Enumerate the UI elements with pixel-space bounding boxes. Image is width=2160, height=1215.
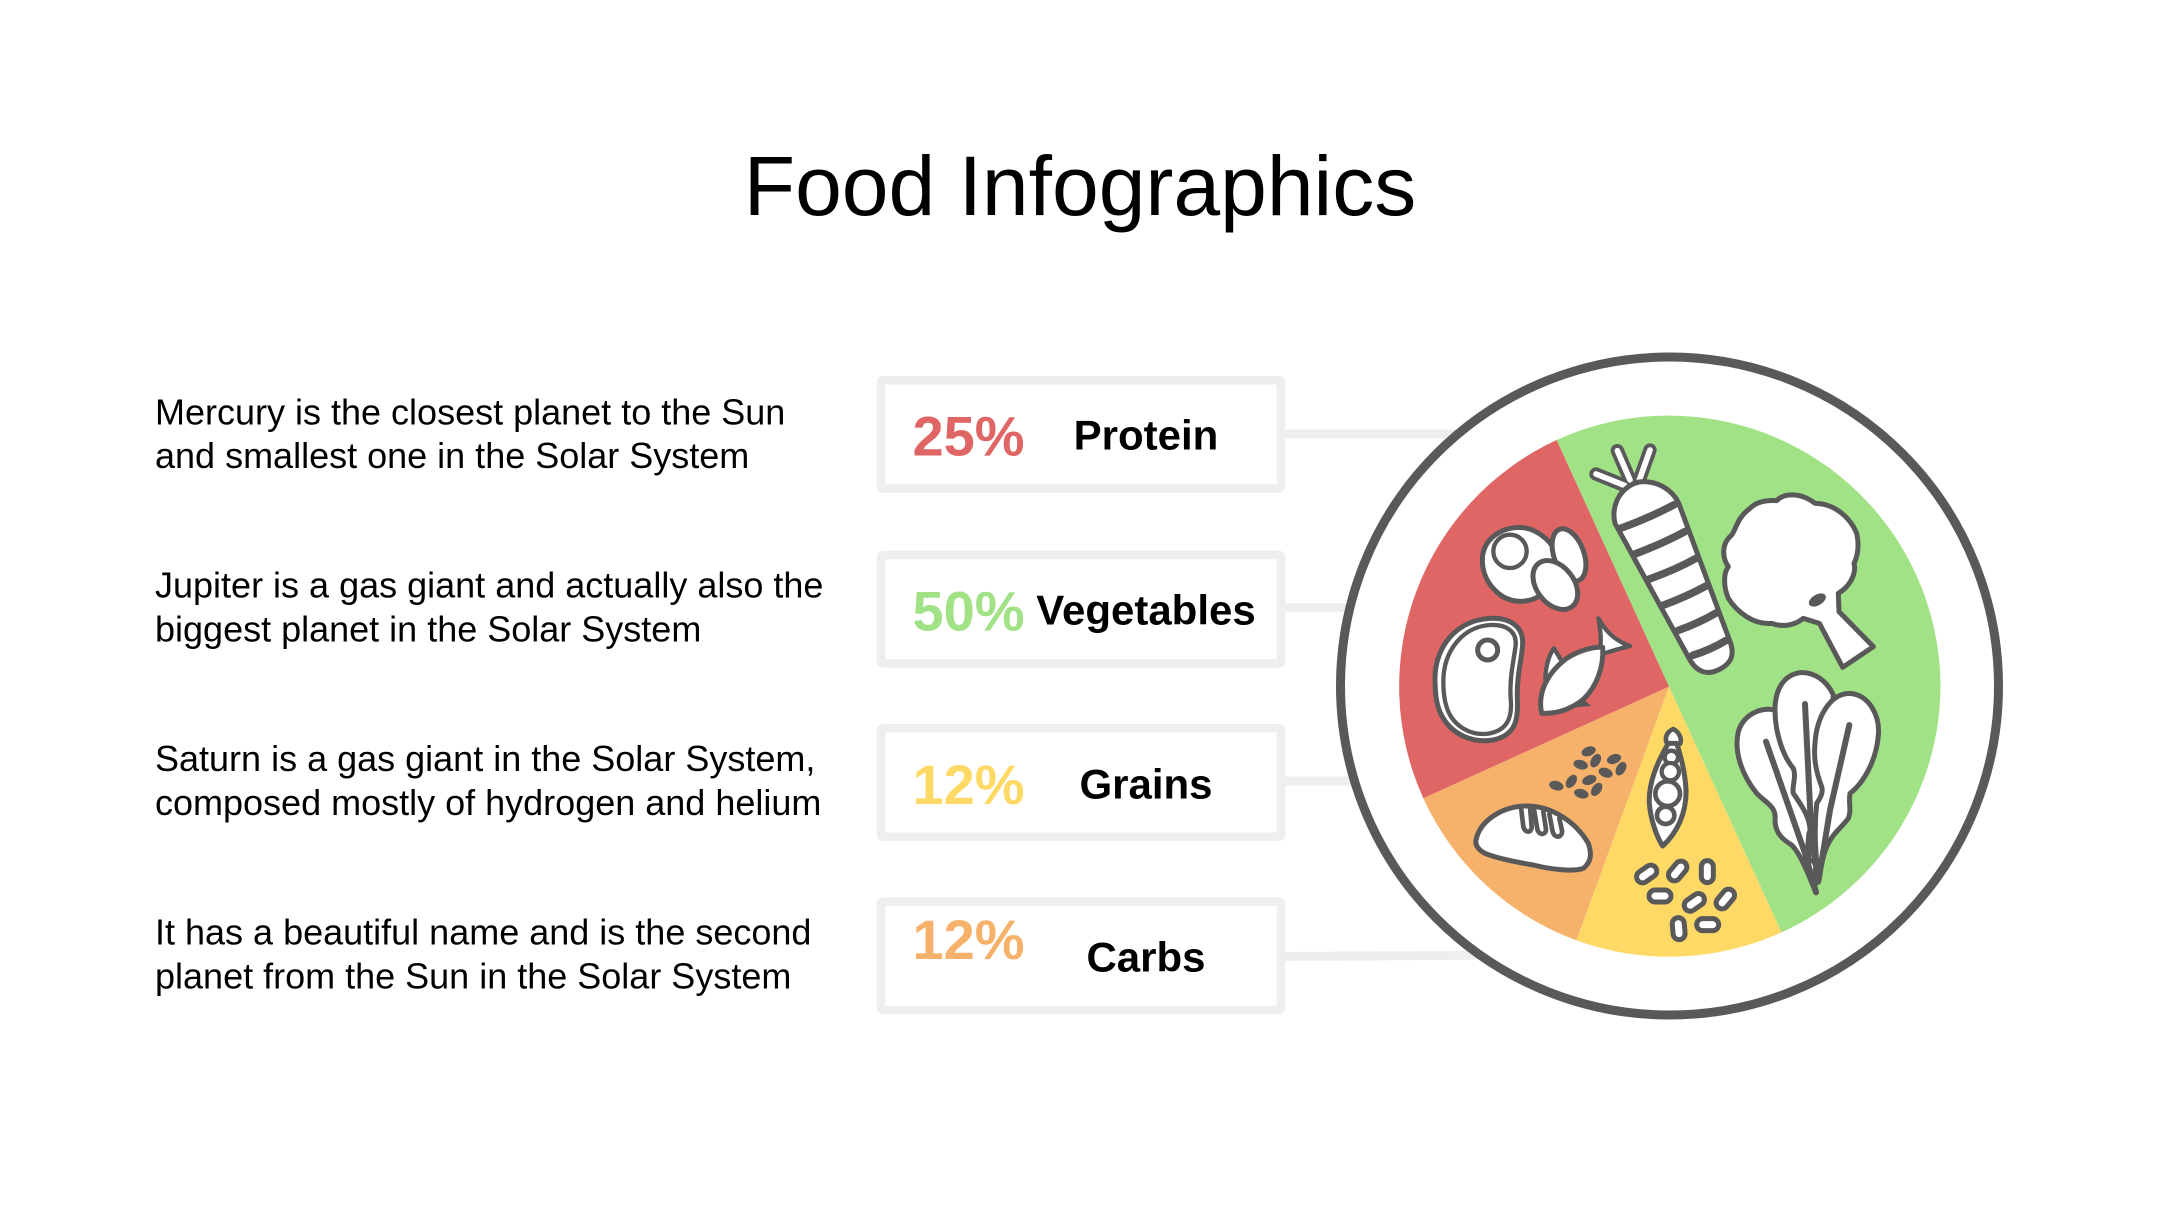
icon: bread: [1476, 806, 1590, 870]
text block: grains description: Saturn is a gas giant in the Solar System,: [155, 738, 815, 779]
box frame: [881, 380, 1281, 489]
percentage: 12%: [912, 753, 1025, 816]
plate rim: [1340, 357, 1998, 1015]
icon: carrot: [1596, 450, 1732, 672]
pie slice: vegetables 50%: [1557, 416, 1940, 932]
icon: spinach: [1737, 673, 1879, 892]
text block: vegetables description: biggest planet in the Solar System: [155, 608, 701, 649]
text block: carbs description: It has a beautiful name and is the second: [155, 912, 811, 953]
pie slice: grains: [1576, 687, 1782, 957]
label: Grains: [1079, 760, 1213, 807]
label: Carbs: [1086, 933, 1206, 980]
percentage: 25%: [912, 405, 1025, 468]
icon: broccoli: [1724, 495, 1873, 667]
connector: vegetables: [1280, 603, 1480, 612]
plate chart: [1340, 357, 1998, 1015]
label: Vegetables: [1036, 587, 1256, 634]
icon: steak: [1435, 618, 1523, 741]
text block: grains description: composed mostly of hydrogen and helium: [155, 782, 821, 823]
label: Protein: [1074, 412, 1218, 459]
panel: protein: [881, 380, 1281, 489]
icon: seeds: [1548, 744, 1629, 800]
connector: protein: [1280, 430, 1480, 438]
pie slice: protein: [1399, 440, 1669, 798]
panel: carbs: [881, 902, 1281, 1010]
percentage: 50%: [912, 580, 1025, 643]
text block: protein description: and smallest one in the Solar System: [155, 435, 749, 476]
text block: protein description: Mercury is the closest planet to the Sun: [155, 391, 785, 432]
panel: grains: [881, 728, 1281, 837]
icon: eggs: [1482, 524, 1592, 618]
box frame: [881, 555, 1281, 663]
box frame: [881, 902, 1281, 1010]
icon: beans: [1634, 859, 1737, 940]
text block: carbs description: planet from the Sun in the Solar System: [155, 955, 791, 996]
icon: fish: [1541, 618, 1630, 713]
pie slice: carbs: [1423, 687, 1669, 940]
percentage: 12%: [912, 908, 1025, 971]
connector: carbs: [1280, 955, 1500, 956]
text block: vegetables description: Jupiter is a gas giant and actually also the: [155, 565, 823, 606]
box frame: [881, 728, 1281, 837]
panel: vegetables: [881, 555, 1281, 663]
title: Food Infographics: [744, 139, 1416, 233]
connector: grains: [1280, 776, 1480, 786]
icon: pea pod: [1649, 729, 1686, 846]
